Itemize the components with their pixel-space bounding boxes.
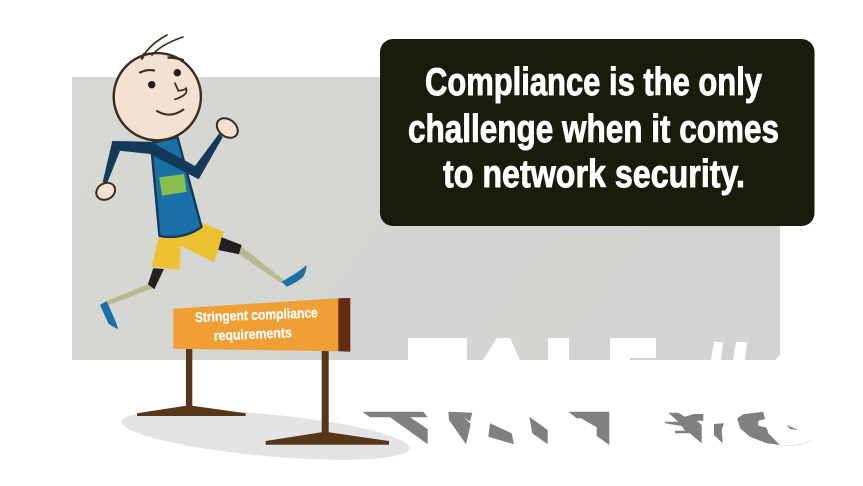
white banner letter fragments: [408, 338, 747, 360]
left hand: [93, 179, 118, 203]
grey banner letter fragments: [362, 412, 812, 445]
hurdle shadow: [120, 401, 411, 469]
right leg: [218, 237, 307, 287]
head: [114, 35, 201, 140]
right hand: [213, 114, 242, 142]
callout text: to network security.: [443, 153, 745, 196]
left leg: [100, 268, 164, 329]
sign label: Stringent compliance: [195, 304, 318, 325]
hair: [142, 35, 183, 60]
sign label: [195, 304, 318, 343]
face: [140, 69, 187, 115]
badge: [159, 174, 187, 196]
callout box: [380, 39, 814, 226]
shorts: [152, 223, 224, 270]
arms: [103, 133, 223, 183]
sign label: requirements: [213, 324, 292, 343]
right post and foot: [266, 350, 389, 445]
left post and foot: [137, 348, 246, 416]
torso: [151, 137, 202, 237]
panel: grey background: [72, 77, 780, 360]
character jumping: [93, 35, 307, 329]
hurdle: [137, 298, 389, 445]
callout text: challenge when it comes: [408, 108, 779, 151]
callout text: [408, 61, 779, 196]
callout text: Compliance is the only: [425, 61, 762, 104]
hurdle sign: [173, 298, 350, 352]
